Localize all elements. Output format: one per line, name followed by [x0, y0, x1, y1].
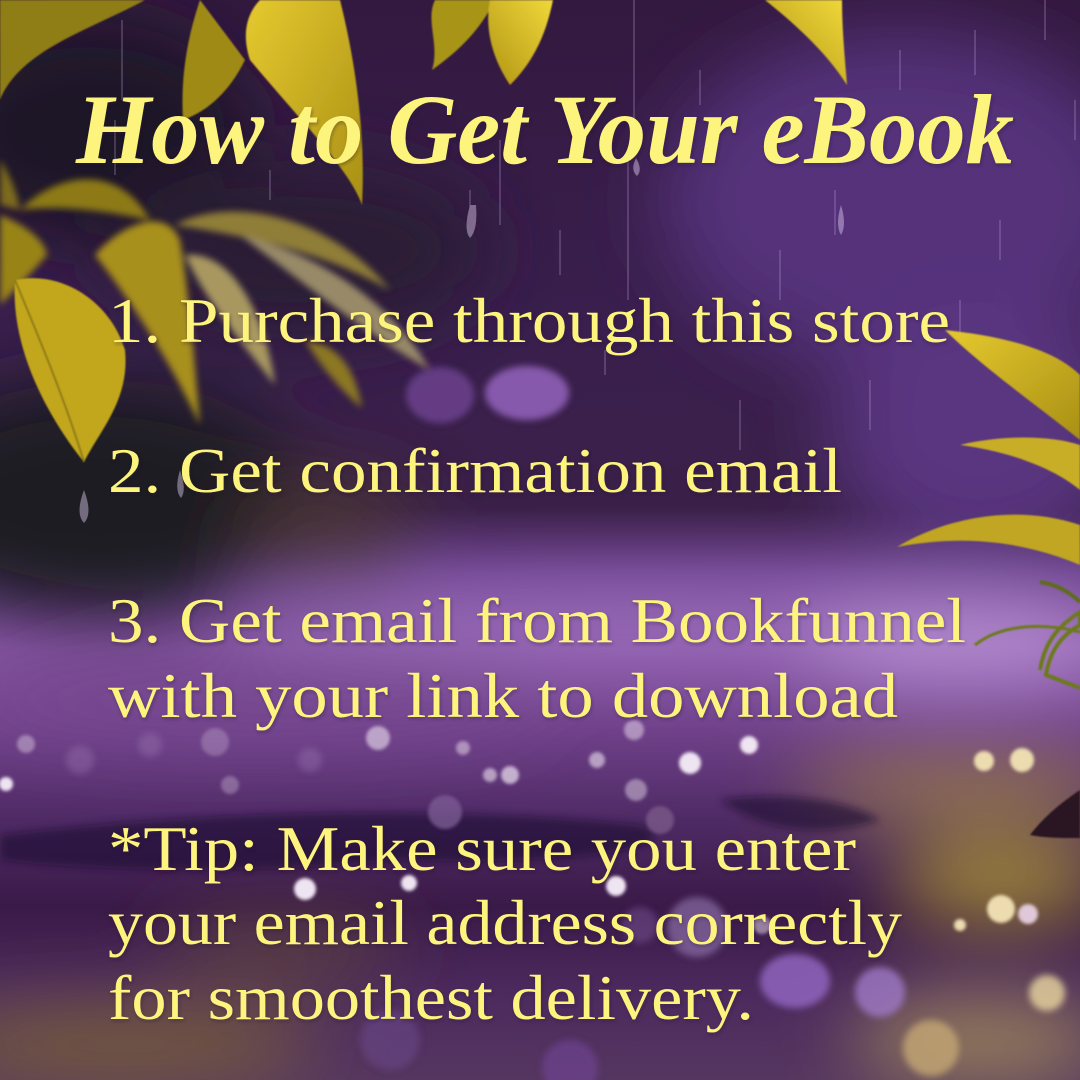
- rain-lit water surface: [0, 796, 880, 869]
- step 2: 2. Get confirmation email: [108, 435, 842, 506]
- step 3: 3. Get email from Bookfunnel: [108, 585, 966, 656]
- tip: *Tip: Make sure you enter: [108, 813, 856, 884]
- step 3: with your link to download: [108, 660, 898, 731]
- tip: your email address correctly: [108, 887, 902, 958]
- foliage: right leaf cluster: [897, 330, 1080, 838]
- rain streaks and drops: [80, 0, 1075, 523]
- step 1: 1. Purchase through this store: [108, 285, 950, 356]
- tip: [108, 813, 902, 1033]
- step 3: [108, 585, 966, 731]
- steps text: [108, 285, 966, 1033]
- title: How to Get Your eBook: [75, 74, 1014, 185]
- bokeh lights: [0, 366, 1065, 1080]
- foliage: left leaf cluster: [0, 160, 430, 462]
- foliage: top leaves: [0, 0, 847, 205]
- tip: for smoothest delivery.: [108, 962, 754, 1033]
